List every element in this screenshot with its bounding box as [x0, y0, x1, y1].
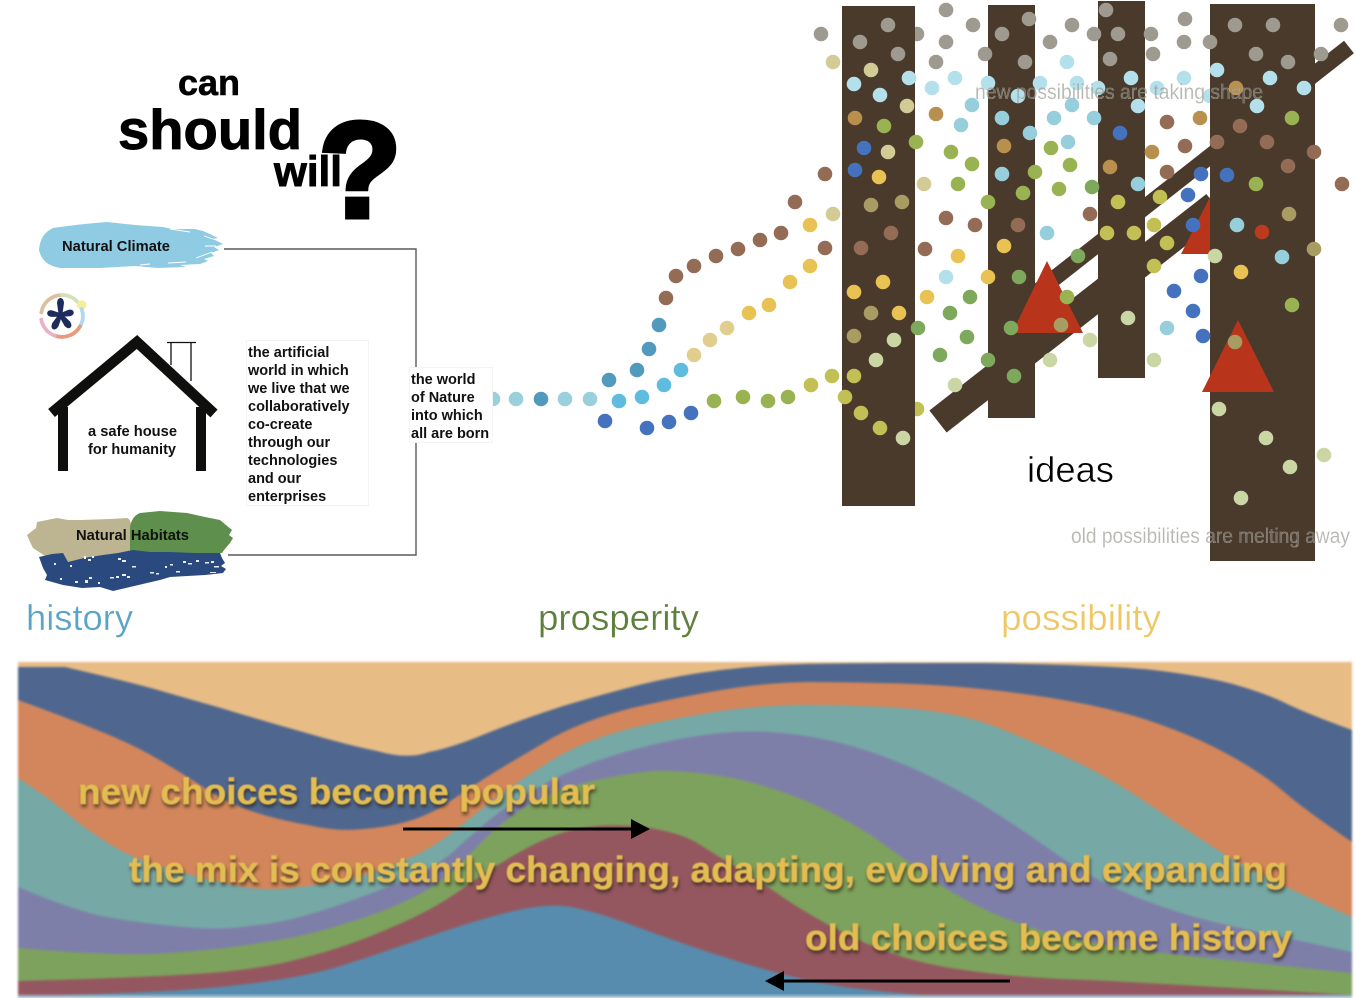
dots: mid blue [954, 98, 1289, 335]
dots: pale blue [847, 55, 1311, 284]
dots: dark khaki [847, 195, 1321, 349]
title: can should will?: ? [318, 94, 402, 246]
text block: the world of Nature: of Nature [411, 390, 475, 406]
dots: brown [659, 115, 1349, 305]
dots: strands hidden behind the columns [486, 27, 1217, 416]
text block: the artificial world: we live that we [247, 381, 350, 397]
icon: safe house: a safe house [88, 424, 177, 440]
stream chart bands [18, 662, 1352, 998]
heading: history: history [26, 597, 133, 638]
text block: the world of Nature [410, 368, 492, 442]
heading: prosperity: prosperity [538, 597, 699, 638]
icon: asterisk in coloured ring [41, 295, 86, 337]
text block: the artificial world: technologies [248, 453, 337, 469]
text block: the world of Nature: the world [411, 372, 475, 388]
dots: blue [598, 126, 1234, 435]
title: can should will?: should [118, 98, 302, 161]
brush label: Natural Climate: Natural Climate [62, 239, 170, 255]
overlay text: old choices become history: old choices become history [805, 917, 1292, 958]
dots: yellow gold [742, 170, 1248, 320]
panel: stream graph of changing choices [18, 662, 1352, 998]
text block: the world of Nature: into which [411, 408, 483, 424]
title: can should will? [118, 62, 402, 246]
dots: yellow green [804, 190, 1174, 435]
caption: ideas: ideas [1027, 449, 1114, 490]
caption: new possibilities are taking shape: new possibilities are taking shape [975, 81, 1263, 104]
dots: pale green [869, 249, 1331, 505]
dots: olive green [707, 111, 1299, 408]
overlay text: new choices become popular: new choices become popular [78, 771, 595, 812]
text block: the world of Nature: all are born [411, 426, 489, 442]
title: can should will?: will [273, 148, 342, 196]
dots: cream [826, 55, 931, 221]
brush label: Natural Habitats: Natural Habitats [76, 528, 189, 544]
arrow: new choices direction [403, 819, 650, 839]
text block: the artificial world: co-create [248, 417, 312, 433]
connector line: nature bracket [224, 249, 416, 555]
diagram: ideas columns and diagonal bars [842, 1, 1349, 561]
text block: the artificial world: world in which [247, 363, 349, 379]
title: can should will?: can [178, 62, 240, 103]
icon: safe house [52, 342, 214, 471]
heading: possibility: possibility [1001, 597, 1161, 638]
text block: the artificial world: collaboratively [248, 399, 350, 415]
overlay text: the mix is constantly changing: the mix is constantly changing, adapting, evolving and expanding [129, 849, 1287, 890]
icon: red triangle on second column [1012, 261, 1083, 333]
dots: ochre [848, 81, 1243, 174]
arrow: old choices direction [765, 971, 1010, 991]
dot: red [1255, 225, 1269, 239]
icon: red triangle on fourth column [1202, 320, 1274, 392]
text block: the artificial world: enterprises [248, 489, 326, 505]
dots: green [911, 180, 1099, 383]
text block: the artificial world: and our [248, 471, 302, 487]
icon: safe house: for humanity [88, 442, 176, 458]
brush label: Natural Climate [39, 222, 223, 268]
brush label: Natural Habitats [27, 511, 233, 591]
dots: strand emerging from the world of Nature [509, 318, 734, 408]
dots: grey possibilities [814, 3, 1348, 69]
text block: the artificial world [246, 340, 368, 506]
text block: the artificial world: the artificial [248, 345, 329, 361]
text block: the artificial world: through our [248, 435, 331, 451]
